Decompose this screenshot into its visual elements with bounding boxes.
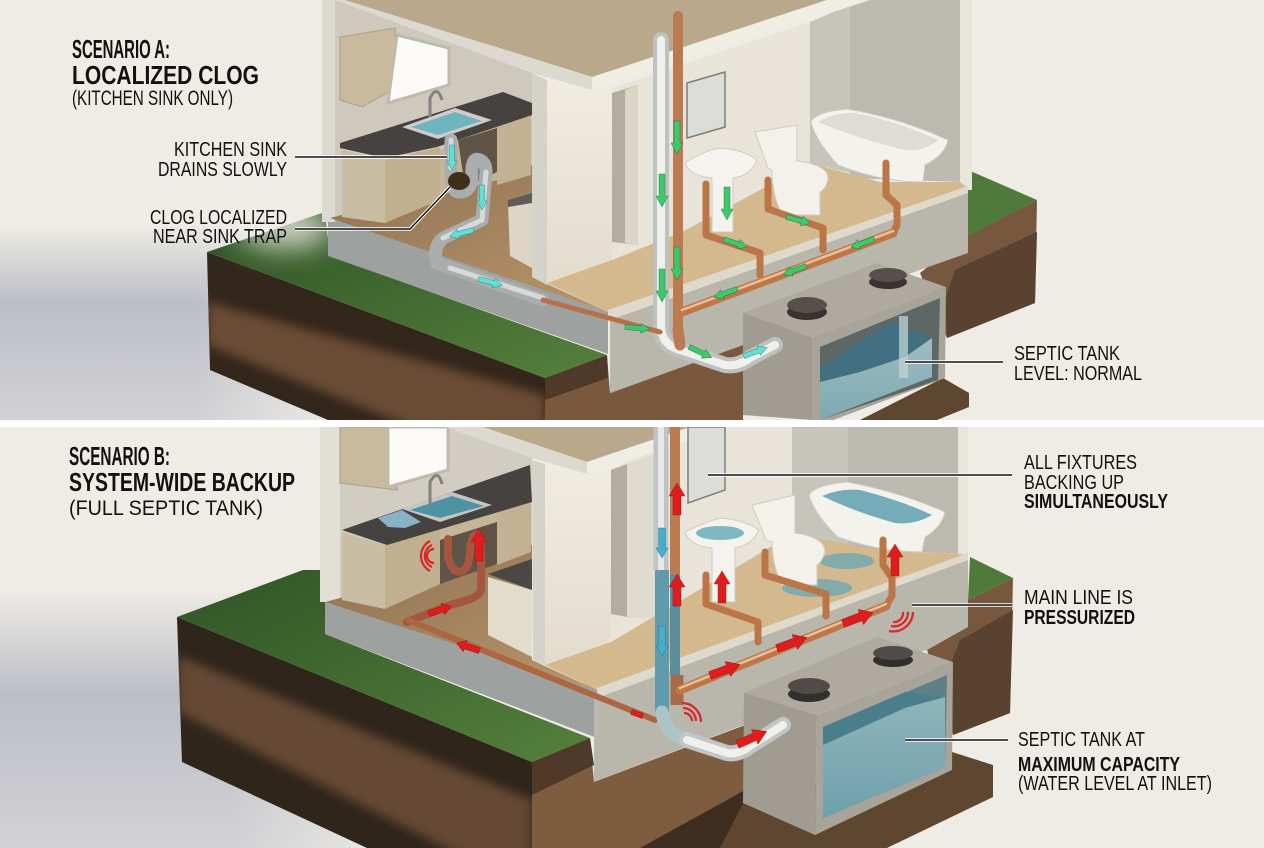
window B (388, 427, 448, 487)
panel: scenario B (0, 427, 1264, 848)
bathtub B (809, 482, 945, 552)
label: kitchen sink drains slowly: DRAINS SLOWLY (158, 159, 287, 181)
pedestal sink A (685, 148, 757, 232)
title B (69, 441, 295, 520)
toilet A (755, 125, 828, 215)
label: kitchen sink drains slowly: KITCHEN SINK (174, 139, 288, 161)
pier A (532, 73, 547, 285)
kitchen sink B (402, 492, 492, 522)
kitchen cabinets B (342, 532, 385, 609)
toilet B (752, 495, 825, 585)
pressure arrows B (427, 483, 903, 752)
copper vent and main line (673, 16, 683, 338)
label glow over lawn A (237, 208, 333, 248)
drain pipes A (435, 16, 897, 365)
label: main line pressurized (1024, 587, 1135, 629)
grey stack (661, 40, 775, 365)
label: clog localized: CLOG LOCALIZED (150, 207, 287, 229)
pedestal sink B (685, 518, 759, 602)
flow arrows A (447, 121, 876, 362)
upper cabinet B (340, 427, 397, 490)
title B: SCENARIO B: (69, 441, 170, 471)
leader lines B (708, 475, 1012, 740)
label: septic tank level normal (1014, 346, 1142, 380)
down arrows in stack B (656, 528, 668, 656)
stack B (654, 427, 668, 570)
pressurized pipes B (407, 427, 892, 753)
label: septic tank at maximum capacity: (WATER LEVEL AT INLET) (1018, 773, 1212, 795)
mirror B (688, 427, 725, 503)
counter overflow B (378, 510, 421, 528)
title B: SYSTEM-WIDE BACKUP (69, 467, 295, 497)
tank lids B (788, 686, 830, 702)
house interior A (322, 0, 972, 320)
lawn A (207, 170, 1037, 378)
label: septic tank at maximum capacity (1018, 729, 1212, 795)
label: all fixtures backing up: SIMULTANEOUSLY (1024, 491, 1169, 513)
pier B (532, 460, 545, 665)
upper cabinet A (340, 28, 397, 107)
bathroom fixtures A (685, 72, 948, 232)
soil block B (177, 578, 1013, 848)
bathroom walls B (611, 427, 792, 642)
mirror A (687, 72, 725, 138)
pressure wave icons B (421, 541, 913, 722)
window A (388, 35, 449, 103)
bathroom walls A (612, 22, 810, 262)
title A: LOCALIZED CLOG (72, 60, 259, 90)
floor puddles B (820, 553, 874, 569)
bathroom fixtures B (685, 427, 945, 602)
foundation B (325, 555, 968, 782)
title A: (KITCHEN SINK ONLY) (72, 87, 233, 110)
label: clog localized: NEAR SINK TRAP (153, 226, 287, 248)
title A: SCENARIO A: (72, 34, 170, 64)
label: all fixtures backing up: ALL FIXTURES (1024, 452, 1137, 474)
house interior B (320, 427, 968, 698)
label: main line pressurized: MAIN LINE IS (1024, 587, 1133, 609)
title A (72, 34, 259, 110)
leader lines A (295, 157, 1003, 362)
ground shadow A (0, 237, 316, 420)
kitchen sink A (402, 108, 492, 139)
bathtub A (811, 109, 948, 182)
label: clog localized (150, 210, 286, 243)
label: septic tank level normal: SEPTIC TANK (1014, 343, 1121, 365)
kitchen drain (435, 140, 543, 300)
label: all fixtures backing up: BACKING UP (1024, 472, 1124, 494)
bathroom floor B (545, 534, 968, 690)
ground shadow B (0, 606, 365, 848)
kitchen cabinets A (342, 150, 385, 223)
label: all fixtures backing up (1024, 452, 1169, 513)
island B (488, 559, 532, 590)
foundation A (328, 190, 968, 393)
ceiling A (335, 0, 827, 77)
label: main line pressurized: PRESSURIZED (1024, 607, 1135, 629)
second puddle B (782, 579, 852, 597)
septic tank B (743, 637, 953, 835)
panel: scenario A (0, 0, 1142, 420)
title B: (FULL SEPTIC TANK) (69, 497, 263, 520)
kitchen trap B (407, 535, 481, 622)
bathroom floor A (547, 163, 968, 312)
divider (0, 420, 1264, 427)
septic tank A (743, 263, 946, 428)
kitchen island A (508, 203, 532, 268)
label: septic tank at maximum capacity: MAXIMUM CAPACITY (1018, 754, 1181, 776)
soil block A (207, 200, 1037, 430)
label: septic tank level normal: LEVEL: NORMAL (1014, 363, 1142, 385)
clog in trap (448, 172, 470, 190)
label: kitchen sink drains slowly (159, 142, 287, 176)
label: septic tank at maximum capacity: SEPTIC TANK AT (1018, 729, 1145, 751)
lawn B (177, 557, 1013, 762)
ceiling B (483, 427, 690, 462)
tank lids A (787, 308, 827, 320)
